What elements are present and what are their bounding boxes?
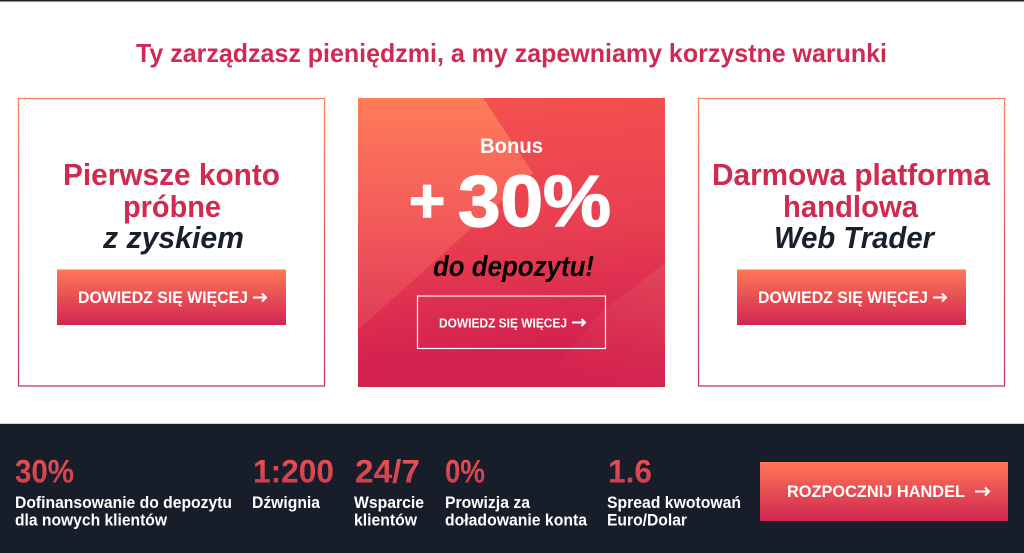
light facet top left (358, 98, 533, 330)
bonus label: Bonus (480, 134, 543, 158)
button: learn more: DOWIEDZ SIĘ WIĘCEJ (78, 289, 248, 307)
stat: deposit bonus: dla nowych klientów (15, 512, 167, 530)
button: learn more outline: DOWIEDZ SIĘ WIĘCEJ (439, 316, 567, 330)
stat: support: 24/7 (355, 454, 420, 490)
stat: commission (445, 454, 588, 530)
stat: support: klientów (354, 512, 417, 530)
heading: web trader: Web Trader (774, 220, 936, 255)
footer band (0, 423, 1024, 553)
light facet bottom right (540, 263, 665, 387)
button: start trading: ROZPOCZNIJ HANDEL (787, 482, 965, 501)
panel border (18, 98, 324, 386)
stat: deposit bonus: 30% (15, 454, 74, 490)
stat: spread (607, 454, 741, 530)
bonus subtitle: do depozytu! (433, 251, 594, 283)
heading: demo account: Pierwsze konto (63, 157, 280, 192)
stat: support (354, 454, 424, 530)
button: learn more outline (418, 296, 606, 348)
title: Ty zarządzasz pieniędzmi, a my zapewniamy korzystne warunki (136, 38, 887, 68)
stat: commission: Prowizja za (445, 494, 531, 512)
stat: support: Wsparcie (354, 494, 424, 512)
button: learn more (737, 270, 966, 325)
panel border (698, 98, 1004, 386)
band top line (0, 423, 1024, 424)
heading: demo account (63, 157, 280, 255)
band background (0, 424, 1024, 553)
stat: spread: Euro/Dolar (607, 512, 688, 530)
panel: bonus (358, 98, 665, 387)
panel: web trader (698, 98, 1004, 386)
panel background (358, 98, 665, 387)
stat: deposit bonus: Dofinansowanie do depozytu (15, 494, 232, 512)
heading: web trader: Darmowa platforma (712, 157, 991, 192)
stat: commission: doładowanie konta (445, 512, 588, 530)
stat: commission: 0% (445, 454, 485, 490)
button: learn more (57, 270, 286, 325)
top edge line (0, 0, 1024, 2)
stat: leverage: 1:200 (253, 454, 334, 490)
stat: leverage: Dźwignia (252, 494, 321, 512)
stat: leverage (252, 454, 334, 512)
bonus value: 30% (458, 162, 611, 242)
panel: demo account (18, 98, 324, 386)
button: learn more: DOWIEDZ SIĘ WIĘCEJ (758, 289, 928, 307)
heading: web trader (712, 157, 991, 255)
stat: deposit bonus (15, 454, 232, 530)
button: start trading (760, 462, 1008, 521)
heading: web trader: handlowa (783, 189, 919, 224)
heading: demo account: z zyskiem (102, 220, 244, 255)
stat: spread: 1.6 (608, 454, 652, 490)
stat: spread: Spread kwotowań (607, 494, 741, 512)
bonus value: + (409, 167, 445, 236)
heading: demo account: próbne (123, 189, 221, 224)
